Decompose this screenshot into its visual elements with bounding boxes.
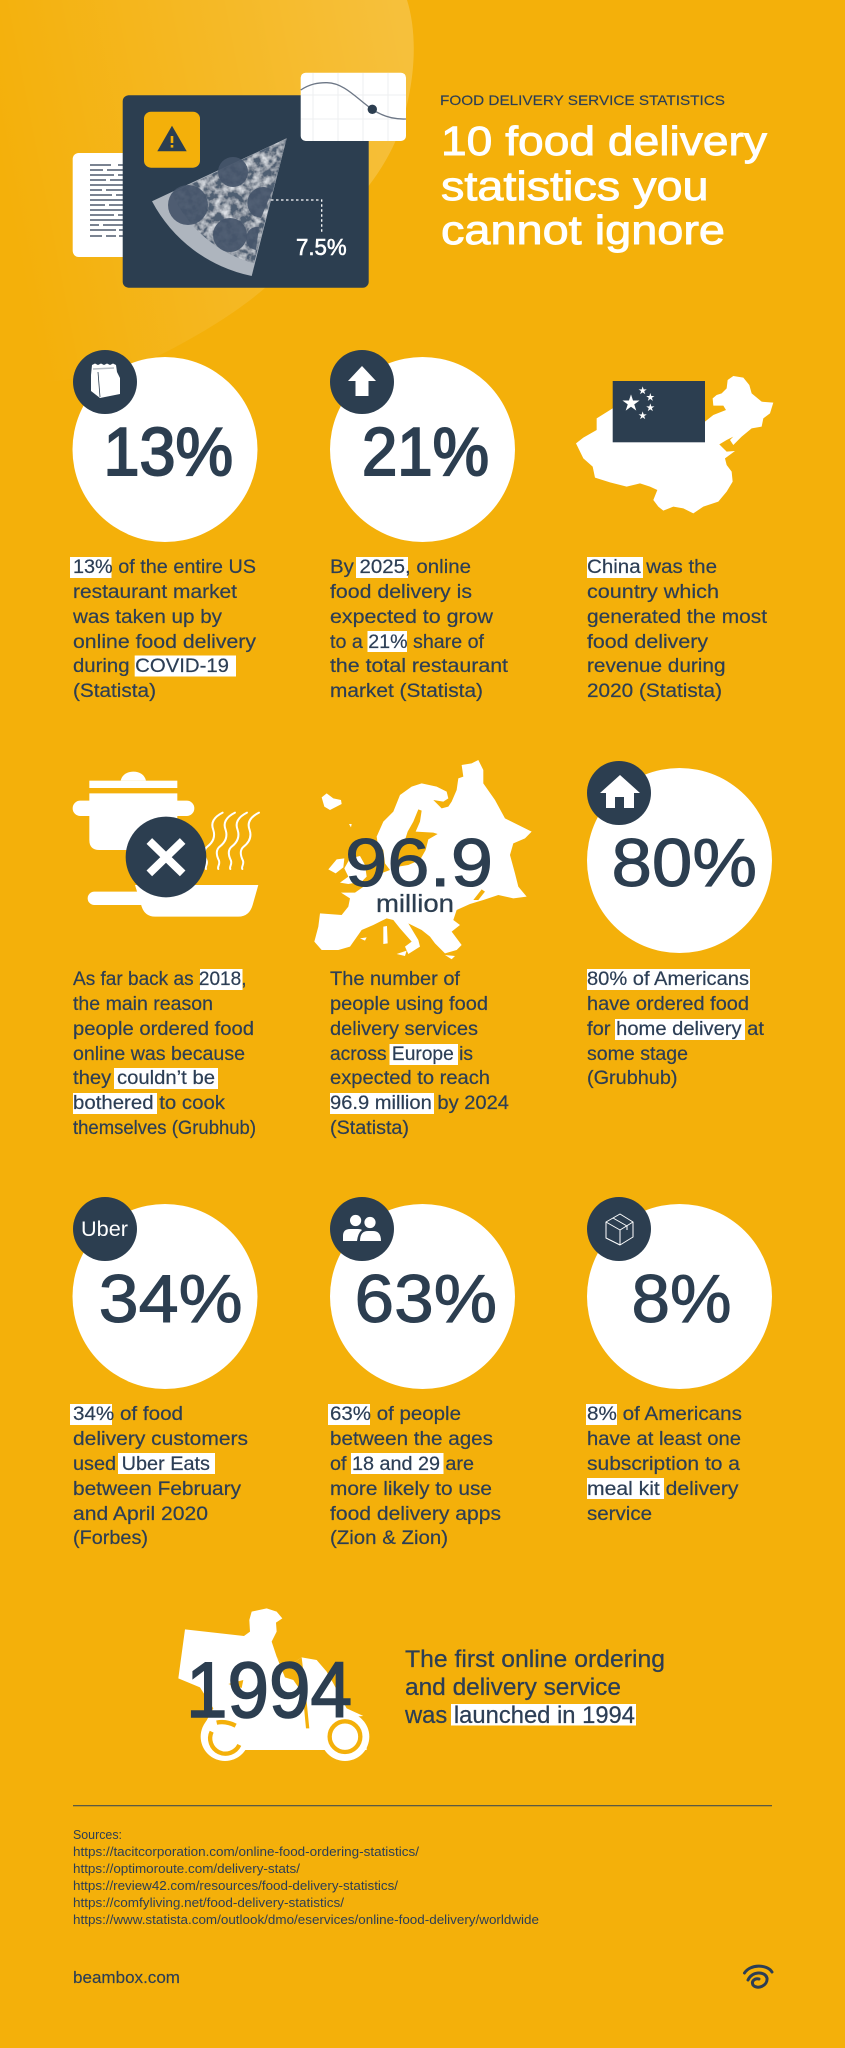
stat circle [330, 1204, 515, 1389]
icon: warning [144, 112, 200, 168]
description: China was the [587, 557, 717, 578]
description: have at least one [587, 1429, 741, 1450]
icon: box [587, 1197, 651, 1261]
panel: 13% market share [70, 350, 258, 702]
sources list: https://www.statista.com/outlook/dmo/eservices/online-food-delivery/worldwide [73, 1913, 539, 1927]
description: was launched in 1994 [404, 1702, 635, 1729]
big number: 63% [354, 1261, 497, 1337]
description: (Statista) [73, 681, 156, 702]
description: the main reason [73, 994, 213, 1015]
icon: delivery scooter [178, 1608, 369, 1761]
title: cannot ignore [441, 207, 725, 253]
description: people using food [330, 994, 488, 1015]
stat circle [587, 1204, 772, 1389]
description: they couldn’t be [73, 1068, 215, 1089]
icon: people [330, 1197, 394, 1261]
description: 13% of the entire US [73, 557, 256, 578]
big number: 8% [632, 1261, 732, 1337]
sources list: https://review42.com/resources/food-delivery-statistics/ [73, 1879, 399, 1893]
description: By 2025, online [330, 557, 471, 578]
description [70, 1404, 248, 1549]
panel: reason for ordering online [73, 772, 259, 1139]
description: to a 21% share of [330, 632, 485, 653]
eyebrow label: FOOD DELIVERY SERVICE STATISTICS [440, 92, 725, 108]
sources list: https://optimoroute.com/delivery-stats/ [73, 1862, 301, 1876]
description: market (Statista) [330, 681, 483, 702]
slice percentage: 7.5% [296, 234, 347, 260]
sources list: https://tacitcorporation.com/online-food-ordering-statistics/ [73, 1845, 420, 1859]
description [330, 557, 509, 702]
stat circle [72, 1204, 258, 1389]
map: China [576, 376, 773, 513]
footer site name: beambox.com [73, 1968, 180, 1987]
description: used Uber Eats [73, 1454, 210, 1475]
icon: Uber [73, 1197, 137, 1261]
description: generated the most [587, 607, 768, 628]
description: bothered to cook [73, 1093, 226, 1114]
description [404, 1646, 665, 1729]
icon: Uber: Uber [81, 1218, 128, 1241]
unit label: million [376, 890, 454, 918]
description: service [587, 1504, 652, 1525]
description: some stage [587, 1044, 688, 1065]
icon: paper bag [73, 350, 137, 414]
panel: 21% share by 2025 [330, 350, 515, 702]
description: country which [587, 582, 719, 603]
description: expected to reach [330, 1068, 490, 1089]
description [587, 969, 765, 1089]
description: themselves (Grubhub) [73, 1118, 256, 1139]
description: of 18 and 29 are [330, 1454, 474, 1475]
stat circle [72, 357, 258, 542]
dotted leader line [271, 200, 322, 232]
mini line chart card [301, 73, 406, 141]
panel: China revenue [576, 376, 773, 702]
big number: 34% [99, 1261, 243, 1337]
description: online food delivery [73, 632, 257, 653]
big number: 1994 [186, 1645, 352, 1734]
sources list: Sources: [73, 1828, 122, 1842]
description: expected to grow [330, 607, 493, 628]
description: online was because [73, 1044, 245, 1065]
description: for home delivery at [587, 1019, 765, 1040]
dark main card [123, 95, 369, 288]
description: (Zion & Zion) [330, 1528, 448, 1549]
document card [73, 153, 143, 257]
description: and April 2020 [73, 1504, 208, 1525]
description [587, 557, 768, 702]
icon: pot and pan [73, 772, 259, 917]
description: between the ages [330, 1429, 493, 1450]
description: The number of [330, 969, 461, 990]
pizza slice [152, 138, 287, 276]
description: delivery customers [73, 1429, 248, 1450]
title: statistics you [441, 163, 708, 209]
description: across Europe is [330, 1044, 473, 1065]
description: As far back as 2018, [73, 969, 246, 990]
description: The first online ordering [405, 1646, 665, 1673]
description: 34% of food [73, 1404, 183, 1425]
description: (Statista) [330, 1118, 409, 1139]
title [441, 118, 768, 253]
description: delivery services [330, 1019, 478, 1040]
stat circle [587, 768, 772, 953]
big number: 96.9 [345, 825, 493, 901]
title: 10 food delivery [441, 118, 768, 164]
panel: 1994 first online ordering [178, 1608, 665, 1761]
description: and delivery service [405, 1674, 621, 1701]
icon: China flag [613, 381, 705, 442]
icon: brand logo [744, 1966, 772, 1987]
description: 80% of Americans [587, 969, 749, 990]
description: people ordered food [73, 1019, 254, 1040]
sources list: https://comfyliving.net/food-delivery-statistics/ [73, 1896, 345, 1910]
sources list [73, 1828, 539, 1927]
description: the total restaurant [330, 656, 509, 677]
description [330, 969, 509, 1139]
description [328, 1404, 501, 1549]
description: revenue during [587, 656, 726, 677]
icon: up arrow [330, 350, 394, 414]
stat circle [330, 357, 515, 542]
description [73, 969, 256, 1139]
description: meal kit delivery [587, 1479, 739, 1500]
description: (Forbes) [73, 1528, 148, 1549]
description: more likely to use [330, 1479, 492, 1500]
big number: 21% [362, 414, 489, 490]
description: 8% of Americans [587, 1404, 742, 1425]
icon: house [587, 761, 651, 825]
description: 2020 (Statista) [587, 681, 722, 702]
panel: 8% meal kit [586, 1197, 772, 1525]
panel: 63% of young people [328, 1197, 515, 1549]
description: food delivery apps [330, 1504, 501, 1525]
panel: 80% of Americans [587, 761, 772, 1089]
description: between February [73, 1479, 242, 1500]
description: restaurant market [73, 582, 238, 603]
description: have ordered food [587, 994, 749, 1015]
description: during COVID-19 [73, 656, 229, 677]
description: was taken up by [72, 607, 223, 628]
panel: Europe users [314, 760, 532, 1139]
big number: 13% [104, 414, 233, 490]
description: food delivery [587, 632, 709, 653]
description: subscription to a [587, 1454, 740, 1475]
description: 63% of people [330, 1404, 461, 1425]
description: 96.9 million by 2024 [330, 1093, 509, 1114]
panel: 34% Uber Eats [70, 1197, 258, 1549]
description: (Grubhub) [587, 1068, 678, 1089]
description: food delivery is [330, 582, 472, 603]
big number: 80% [612, 825, 757, 901]
hero illustration [73, 73, 406, 288]
map: Europe [314, 760, 532, 959]
description [70, 557, 257, 702]
description [586, 1404, 742, 1525]
